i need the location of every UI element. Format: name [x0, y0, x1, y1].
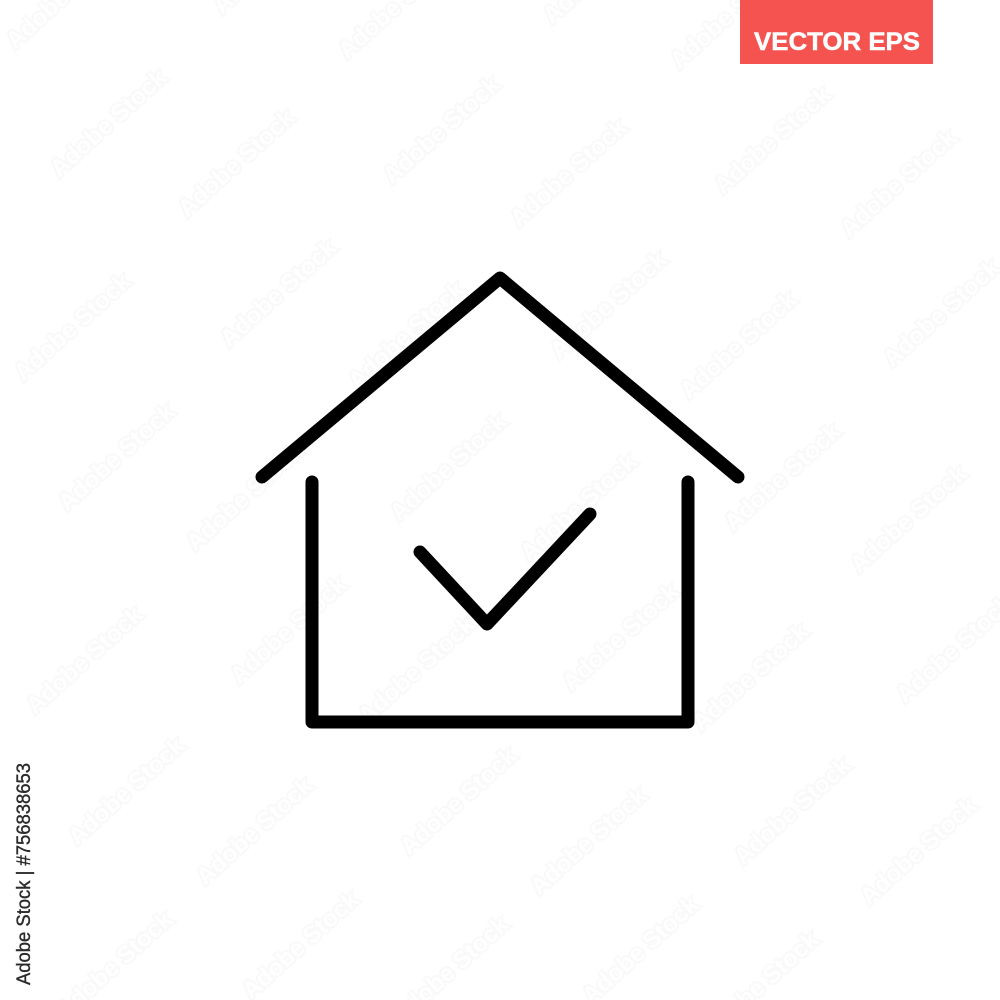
icon: house with check mark [262, 278, 738, 722]
watermark pattern: Adobe Stock [63, 732, 191, 850]
watermark pattern: Adobe Stock [525, 782, 653, 900]
watermark pattern: Adobe Stock [687, 618, 815, 736]
watermark pattern: Adobe Stock [191, 772, 319, 890]
watermark pattern: Adobe Stock [845, 460, 973, 578]
watermark pattern: Adobe Stock [855, 792, 983, 910]
watermark pattern: Adobe Stock [709, 81, 837, 199]
watermark pattern: Adobe Stock [719, 418, 847, 536]
watermark pattern: Adobe Stock [9, 268, 137, 386]
watermark pattern: Adobe Stock [557, 578, 685, 696]
watermark pattern: Adobe Stock [835, 124, 963, 242]
watermark pattern: Adobe Stock [729, 752, 857, 870]
badge: vector eps: VECTOR EPS [754, 28, 920, 56]
watermark pattern: Adobe Stock [181, 438, 309, 556]
watermark pattern: Adobe Stock [505, 114, 633, 232]
icon: check mark [420, 514, 590, 624]
icon: house walls [312, 482, 688, 722]
watermark pattern: Adobe Stock [545, 246, 673, 364]
watermark pattern: Adobe Stock [45, 64, 173, 182]
watermark pattern: Adobe Stock [515, 448, 643, 566]
icon: roof [262, 278, 738, 477]
badge: vector eps [740, 0, 933, 64]
watermark pattern: Adobe Stock [53, 398, 181, 516]
watermark pattern: Adobe Stock [675, 286, 803, 404]
watermark pattern: Adobe Stock [225, 571, 353, 689]
watermark pattern: Adobe Stock [21, 601, 149, 719]
watermark pattern: Adobe Stock [353, 611, 481, 729]
watermark pattern: Adobe Stock [215, 234, 343, 352]
watermark pattern: Adobe Stock [378, 71, 506, 189]
watermark pattern: Adobe Stock [343, 276, 471, 394]
watermark pattern: Adobe Stock [173, 104, 301, 222]
stock id side label: Adobe Stock | #756838653 [14, 763, 35, 985]
watermark pattern: Adobe Stock [395, 742, 523, 860]
watermark pattern: Adobe Stock [385, 408, 513, 526]
